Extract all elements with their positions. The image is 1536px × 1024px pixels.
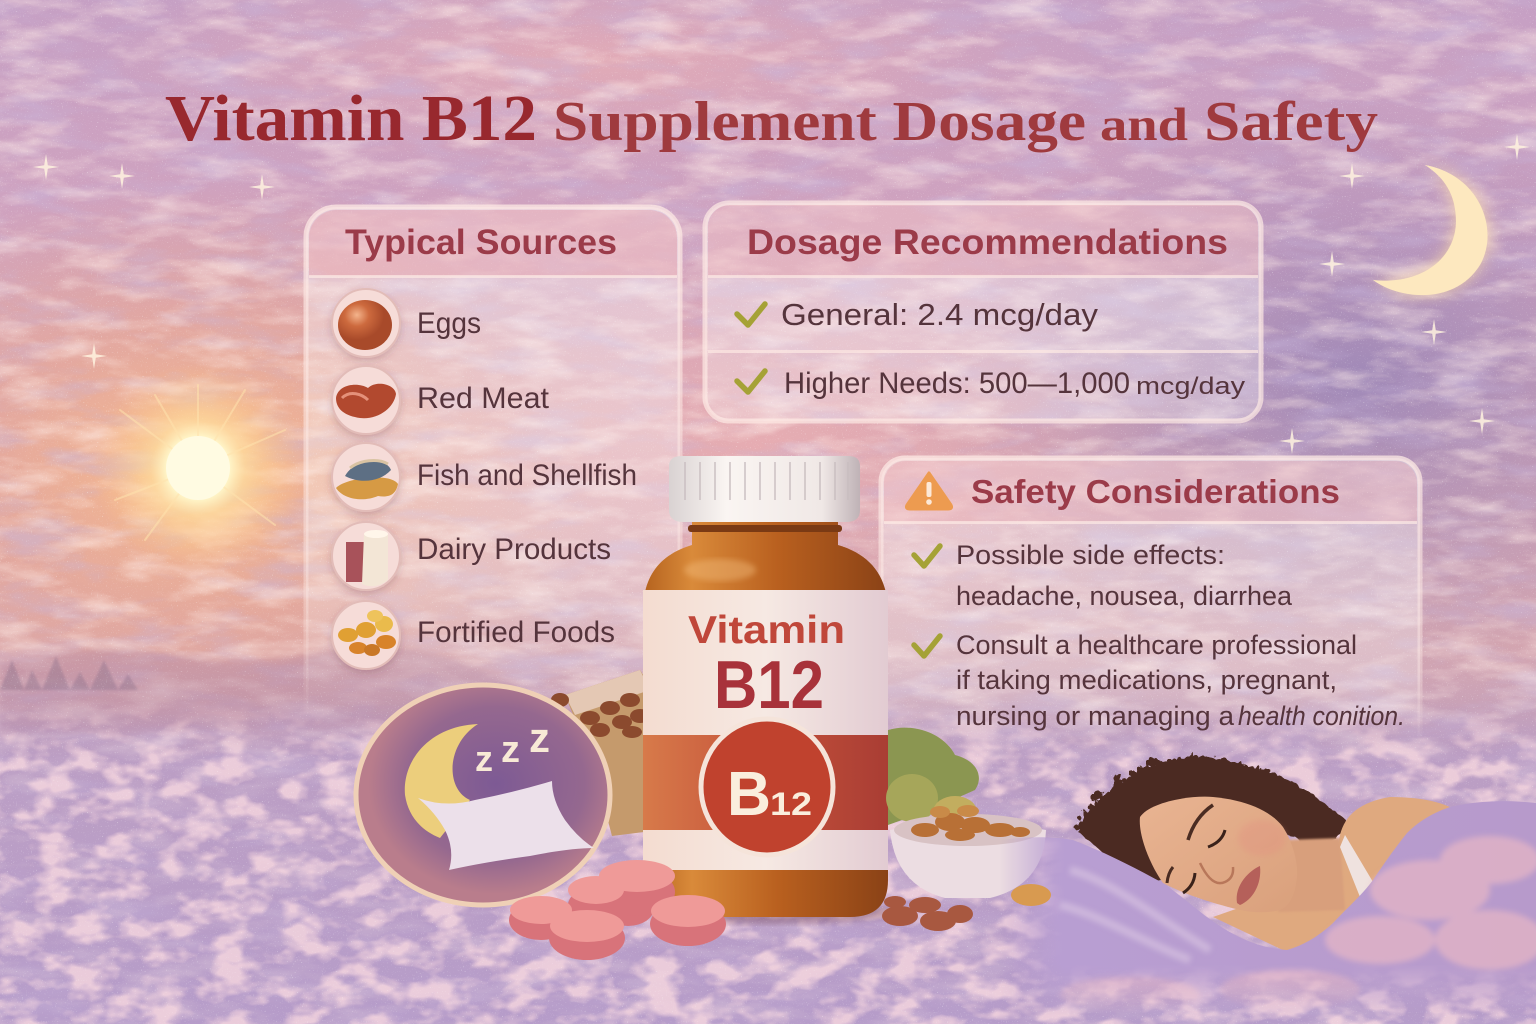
dosage: higher needs: Higher Needs: 500—1,000	[784, 367, 1130, 400]
hair	[1073, 752, 1343, 885]
title: Safety	[1204, 91, 1378, 153]
orange bean	[1011, 884, 1051, 906]
sack of nuts behind bottle	[551, 670, 660, 836]
shoulder and arm	[1213, 797, 1452, 952]
bottle	[643, 456, 895, 924]
badge: B12: 12	[770, 786, 812, 822]
heading: safety considerations: Safety Considerations	[971, 473, 1340, 510]
dosage: higher needs	[737, 367, 1245, 400]
heading: dosage recommendations: Dosage Recommendations	[747, 223, 1228, 262]
safety: side effects	[914, 540, 1293, 611]
source: eggs	[332, 289, 481, 357]
panel: typical sources	[306, 207, 680, 720]
title: and	[1100, 99, 1188, 151]
icon: pillow	[418, 781, 594, 870]
cap	[669, 456, 860, 522]
heading: typical sources: Typical Sources	[345, 223, 617, 262]
sleep medallion	[356, 685, 610, 905]
icon: crescent	[405, 724, 478, 838]
source: eggs: Eggs	[417, 307, 481, 340]
label: B12	[714, 647, 824, 723]
source: fortified foods: Fortified Foods	[417, 616, 615, 649]
source: fortified foods	[332, 601, 615, 669]
source: red meat	[332, 366, 550, 434]
title: Supplement Dosage	[553, 91, 1086, 153]
sun with rays	[93, 363, 303, 573]
safety: side effects: headache, nousea, diarrhea	[956, 581, 1293, 611]
source: fish and shellfish	[332, 443, 637, 511]
safety: consult a professional: health conition.	[1238, 701, 1405, 731]
neck	[1278, 838, 1345, 912]
zzz: z	[501, 729, 520, 771]
zzz: z	[529, 714, 550, 761]
facial features	[1167, 805, 1233, 893]
safety: consult a professional: Consult a healthcare professional	[956, 630, 1357, 660]
zzz: z	[475, 738, 493, 779]
label	[643, 590, 888, 870]
source: fish and shellfish: Fish and Shellfish	[417, 459, 637, 492]
label: Vitamin	[688, 609, 845, 652]
dosage: general: General: 2.4 mcg/day	[781, 297, 1099, 332]
blanket	[1007, 801, 1536, 1008]
safety: consult a professional: nursing or managing a	[956, 701, 1235, 731]
source: red meat: Red Meat	[417, 382, 550, 415]
zzz	[475, 714, 550, 779]
panel: dosage recommendations	[705, 203, 1261, 421]
tablets	[509, 860, 726, 960]
sleeping woman	[990, 752, 1536, 1024]
greens and bowl of nuts	[882, 728, 1046, 931]
safety: consult a professional: if taking medications, pregnant,	[956, 665, 1337, 695]
badge: B12: B	[727, 760, 771, 829]
source: dairy products	[332, 522, 611, 590]
safety: consult a professional	[914, 630, 1405, 731]
sparkles	[33, 134, 1530, 454]
safety: side effects: Possible side effects:	[956, 540, 1225, 570]
title	[165, 82, 1378, 155]
badge: B12	[701, 719, 833, 855]
panel: safety considerations	[881, 458, 1420, 745]
dosage: higher needs: mcg/day	[1136, 373, 1245, 400]
face	[1140, 797, 1297, 912]
icon: warning triangle	[906, 473, 952, 509]
title: Vitamin B12	[165, 82, 537, 155]
beans	[882, 896, 973, 931]
crescent moon	[1373, 165, 1488, 295]
source: dairy products: Dairy Products	[417, 533, 611, 566]
